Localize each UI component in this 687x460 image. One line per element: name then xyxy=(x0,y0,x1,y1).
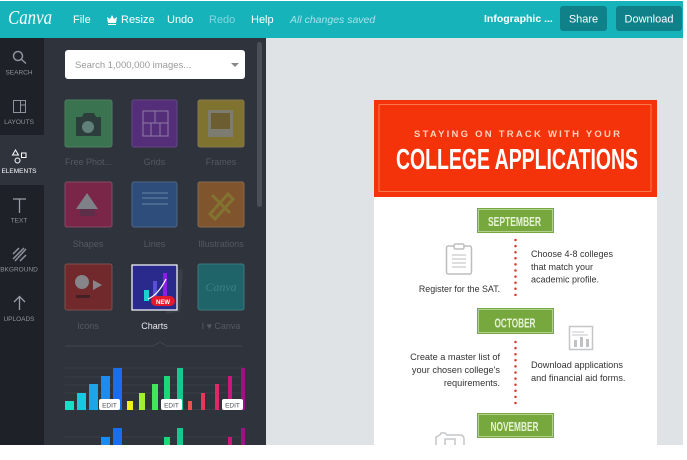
scrollbar xyxy=(257,42,262,207)
month: october: OCTOBER xyxy=(494,316,536,330)
tile: illustrations: Illustrations xyxy=(198,239,244,249)
tile: i love canva: Canva xyxy=(205,280,237,294)
tile: icons: Icons xyxy=(77,321,99,331)
text: master list: your chosen college's xyxy=(412,365,500,375)
search box: Search 1,000,000 images... xyxy=(75,60,191,71)
tile: lines xyxy=(132,182,177,249)
menu items xyxy=(73,14,274,26)
text: master list xyxy=(410,352,500,388)
menu items: Redo xyxy=(209,14,235,26)
tile: free photos: Free Phot... xyxy=(65,157,112,167)
icon: bar chart document xyxy=(570,326,592,350)
tile: i love canva xyxy=(198,264,244,331)
month: october xyxy=(477,308,554,334)
infographic page xyxy=(374,100,657,445)
tile: free photos xyxy=(65,100,112,167)
bar chart 1 xyxy=(65,368,122,410)
menu items: Help xyxy=(251,14,274,26)
timeline dots xyxy=(514,240,517,301)
text: download applications: and financial aid forms. xyxy=(531,373,625,383)
month: september: SEPTEMBER xyxy=(488,214,541,229)
side panel xyxy=(44,38,266,445)
tile: charts (selected): Charts xyxy=(141,321,168,331)
nav: elements: ELEMENTS xyxy=(1,168,37,175)
tile: shapes xyxy=(65,182,112,249)
bar chart 2 xyxy=(127,368,183,410)
tile: icons xyxy=(65,264,112,331)
tile: charts (selected): NEW xyxy=(156,300,170,306)
share button: Share xyxy=(569,14,598,26)
nav: uploads xyxy=(3,296,35,323)
nav: background: BKGROUND xyxy=(0,266,38,274)
timeline dots xyxy=(514,342,517,404)
edit badges xyxy=(99,399,243,410)
tile: charts (selected) xyxy=(132,265,183,331)
top bar xyxy=(0,1,683,38)
edit badges: EDIT xyxy=(164,402,179,410)
icon: clipboard xyxy=(446,244,472,274)
nav: layouts xyxy=(4,100,35,126)
download button xyxy=(616,6,682,31)
navigation rail xyxy=(0,38,44,445)
nav: text xyxy=(11,199,27,224)
divider with chevron xyxy=(65,342,243,346)
text: master list: requirements. xyxy=(444,378,500,388)
tile: i love canva: I ♥ Canva xyxy=(202,321,240,331)
nav: search: SEARCH xyxy=(5,70,33,76)
search box xyxy=(65,50,245,79)
nav: text: TEXT xyxy=(11,218,27,224)
text: choose colleges: academic profile. xyxy=(531,274,599,284)
document title: Infographic ... xyxy=(484,13,553,25)
month: november: NOVEMBER xyxy=(490,419,539,434)
month: november xyxy=(477,413,554,438)
tile: shapes: Shapes xyxy=(73,239,104,249)
text: download applications: Download applications xyxy=(531,360,623,370)
tile: grids xyxy=(132,100,177,167)
canvas background xyxy=(266,37,683,445)
subtitle: STAYING ON TRACK WITH YOUR xyxy=(414,129,620,140)
menu items: Resize xyxy=(121,14,155,26)
menu items: Undo xyxy=(167,14,193,26)
menu items: File xyxy=(73,14,91,26)
download button: Download xyxy=(625,14,673,26)
save status: All changes saved xyxy=(289,14,376,26)
month: september xyxy=(477,208,554,233)
edit badges: EDIT xyxy=(102,402,117,410)
tile: illustrations xyxy=(198,182,244,249)
text: choose colleges xyxy=(531,249,614,284)
nav: layouts: LAYOUTS xyxy=(4,119,35,126)
tile: grids: Grids xyxy=(144,157,166,167)
nav: elements xyxy=(1,150,37,175)
nav: search xyxy=(5,52,33,76)
text: register: Register for the SAT. xyxy=(419,284,500,294)
text: download applications xyxy=(531,360,625,383)
logo: Canva xyxy=(8,7,52,29)
nav: uploads: UPLOADS xyxy=(3,316,35,323)
share button xyxy=(560,6,607,31)
bar chart 3 xyxy=(188,368,245,410)
text: choose colleges: that match your xyxy=(531,262,593,272)
tile: frames: Frames xyxy=(206,157,237,167)
edit badges: EDIT xyxy=(225,402,240,410)
chart thumbnails xyxy=(65,368,245,445)
text: choose colleges: Choose 4-8 colleges xyxy=(531,249,614,259)
nav: background xyxy=(0,248,38,274)
bottom white strip xyxy=(0,445,687,460)
icon: partially visible camera xyxy=(436,433,464,445)
second row of charts xyxy=(101,428,245,445)
header banner xyxy=(374,100,657,197)
text: master list: Create a master list of xyxy=(410,352,500,362)
tile: lines: Lines xyxy=(144,239,166,249)
tile: frames xyxy=(198,100,244,167)
